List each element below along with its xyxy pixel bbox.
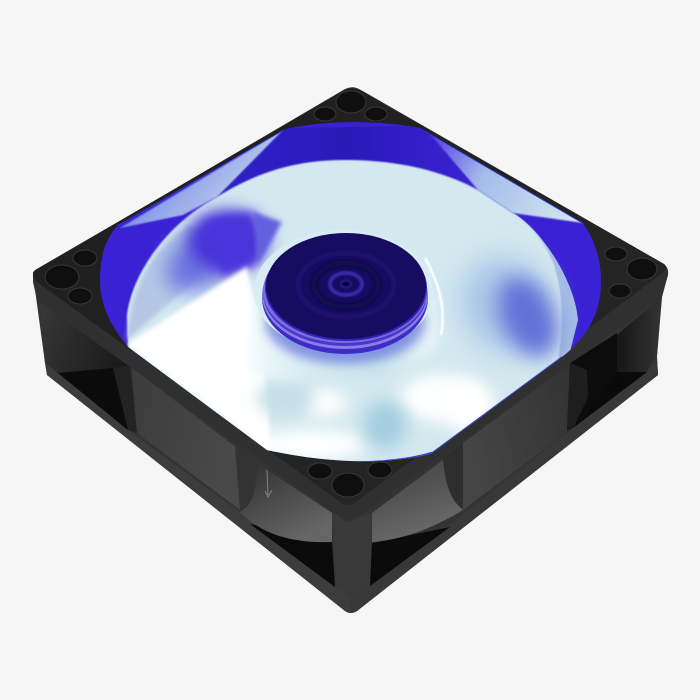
pale blade tip upper right [425, 128, 583, 223]
outer pale rim [254, 230, 434, 352]
purple beside hub [253, 212, 282, 262]
top dark wedge [222, 126, 440, 194]
embossed arrow mark [265, 470, 272, 497]
right corner holes [605, 247, 657, 298]
hub [250, 230, 443, 381]
top corner holes [314, 91, 387, 121]
concentric rings [298, 253, 394, 317]
blue ring base [90, 110, 610, 470]
pale blade tip upper left [120, 130, 283, 228]
left pale blade tint [124, 226, 194, 341]
illustration: LED case fan [32, 87, 668, 613]
front corner pillar [332, 513, 372, 597]
hub cylinder [250, 295, 438, 381]
front-right window [370, 443, 463, 586]
hub dark cap [266, 233, 426, 339]
blue edge highlights [118, 128, 583, 453]
hub shadow band [265, 280, 425, 364]
bottom corner holes [308, 462, 392, 497]
plate side band [33, 87, 668, 522]
left window [40, 302, 137, 433]
white lower glows [400, 374, 484, 422]
hub center rings [330, 273, 362, 295]
left corner holes [45, 250, 97, 304]
purple rim bands [262, 242, 428, 354]
illuminated rotor opening [90, 110, 610, 470]
right grey-blue band [513, 213, 578, 362]
curved blade [372, 460, 463, 542]
side wall base [34, 275, 667, 613]
curved blade [240, 463, 332, 542]
left middle panel [132, 368, 240, 510]
right bottom lip [350, 357, 658, 613]
pale blue lower patches [363, 401, 407, 449]
fan side walls [34, 275, 667, 613]
plate top face [33, 88, 666, 505]
white highlight on right [425, 258, 443, 335]
main pale impeller [127, 160, 562, 470]
mounting holes [45, 91, 657, 497]
front-left window [235, 447, 335, 587]
right middle panel [463, 367, 567, 510]
top frame plate [33, 87, 668, 522]
right window [567, 297, 662, 431]
upper-left purple blade [155, 220, 238, 304]
left bottom lip [45, 363, 350, 613]
right blue blade smear [452, 248, 555, 362]
bright white lower-left blade [128, 267, 272, 455]
